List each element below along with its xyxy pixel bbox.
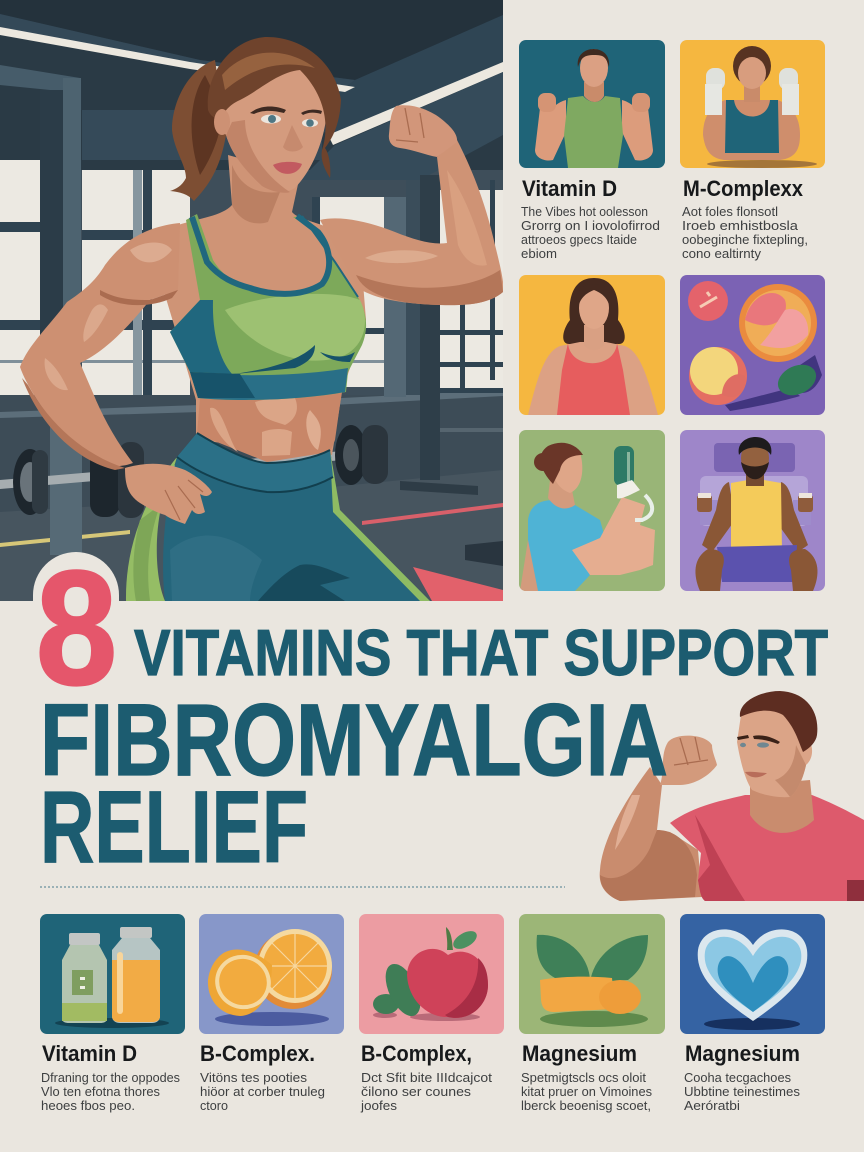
card: M-Complex woman with gloves xyxy=(680,40,825,168)
tile: red apple xyxy=(359,914,504,1034)
tile label: Vitamin D: Dfraning tor the oppodes xyxy=(41,1070,180,1085)
tile label: Magnesium second: Ubbtine teinestimes xyxy=(684,1084,801,1099)
hair xyxy=(208,37,341,178)
flexed arm xyxy=(600,767,702,901)
tile label: B-Complex.: B-Complex. xyxy=(200,1041,315,1066)
tile label: B-Complex, xyxy=(360,1041,492,1113)
fist xyxy=(660,736,717,785)
tile: blue heart xyxy=(680,914,825,1034)
tile label: B-Complex,: čilono ser counes xyxy=(361,1084,472,1099)
tile label: Magnesium xyxy=(521,1041,652,1113)
head xyxy=(225,70,326,185)
tile label: Magnesium second: Cooha tecgachoes xyxy=(684,1070,791,1085)
tile: citrus fruit xyxy=(199,914,344,1034)
tile label: Magnesium: lberck beoenisg scoet, xyxy=(521,1098,651,1113)
cream backing of the 8 xyxy=(33,552,119,652)
ponytail xyxy=(170,60,226,201)
tile label: B-Complex. xyxy=(200,1041,325,1113)
raised arm xyxy=(320,140,503,305)
card label: M-Complexx: Iroeb emhistbosla xyxy=(682,218,799,233)
card label: M-Complexx xyxy=(682,176,808,261)
tile label: Vitamin D: Vitamin D xyxy=(42,1041,137,1066)
neck xyxy=(750,780,814,833)
tile label: B-Complex,: Dct Sfit bite IIIdcajcot xyxy=(361,1070,492,1085)
tile label: Magnesium: Spetmigtscls ocs oloit xyxy=(521,1070,646,1085)
card label: Vitamin D: Grorrg on I iovolofirrod xyxy=(521,218,660,233)
tile: supplement bottles xyxy=(40,914,185,1034)
tile label: B-Complex,: B-Complex, xyxy=(361,1041,472,1066)
tile label: B-Complex.: ctoro xyxy=(200,1098,228,1113)
card label: M-Complexx: M-Complexx xyxy=(683,176,804,201)
dotted divider xyxy=(40,886,565,888)
left arm on hip xyxy=(20,223,180,466)
title: FIBROMYALGIA: FIBROMYALGIA xyxy=(40,683,668,797)
tile label: Magnesium second: Aeróratbi xyxy=(684,1098,740,1113)
leggings xyxy=(163,433,430,601)
hand on hip xyxy=(125,464,212,524)
tile label: Magnesium second: Magnesium xyxy=(685,1041,800,1066)
card label: M-Complexx: cono ealtirnty xyxy=(682,246,762,261)
fist xyxy=(389,105,457,157)
number 8 badge: 8 xyxy=(36,537,117,719)
green crop top xyxy=(170,214,366,400)
man's head xyxy=(737,705,812,797)
card: foods on purple xyxy=(680,275,825,415)
tile label: Vitamin D: Vlo ten efotna thores xyxy=(41,1084,160,1099)
neck and torso xyxy=(165,155,366,455)
tile label: Magnesium second xyxy=(684,1041,801,1113)
tile label: B-Complex.: hiöor at corber tnuleg xyxy=(200,1084,325,1099)
frames and posts xyxy=(0,65,80,90)
card label: Vitamin D: Vitamin D xyxy=(522,176,617,201)
gym room background xyxy=(0,0,503,601)
tile label: Magnesium: Magnesium xyxy=(522,1041,637,1066)
card: bearded man seated xyxy=(680,430,825,591)
tile label: Magnesium: kitat pruer on Vimoines xyxy=(521,1084,652,1099)
card: woman in red top xyxy=(519,275,665,415)
red shirt xyxy=(670,795,864,901)
card label: Vitamin D: The Vibes hot oolesson xyxy=(521,204,648,219)
card: Vitamin D man flexing xyxy=(519,40,665,168)
card label: M-Complexx: Aot foles flonsotl xyxy=(682,204,778,219)
wall and floor xyxy=(460,398,465,460)
abs xyxy=(197,390,342,462)
tile label: Vitamin D: heoes fbos peo. xyxy=(41,1098,135,1113)
tile label: B-Complex.: Vitöns tes pooties xyxy=(200,1070,308,1085)
tile: leaves and capsule xyxy=(519,914,665,1034)
windows xyxy=(0,160,40,395)
title: RELIEF: RELIEF xyxy=(40,770,308,884)
panel: gym hero scene xyxy=(0,0,503,601)
tile label: B-Complex,: joofes xyxy=(360,1098,398,1113)
card label: Vitamin D: ebiom xyxy=(521,246,557,261)
card label: Vitamin D: attroeos gpecs Itaide xyxy=(521,232,637,247)
tile label: Vitamin D xyxy=(41,1041,180,1113)
woman: athlete flexing xyxy=(20,37,503,601)
barbell xyxy=(0,425,388,518)
card: woman with shaker xyxy=(519,430,665,591)
man flexing illustration xyxy=(600,691,864,901)
face features xyxy=(250,107,322,174)
card label: M-Complexx: oobeginche fixtepling, xyxy=(682,232,808,247)
card label: Vitamin D xyxy=(521,176,660,261)
